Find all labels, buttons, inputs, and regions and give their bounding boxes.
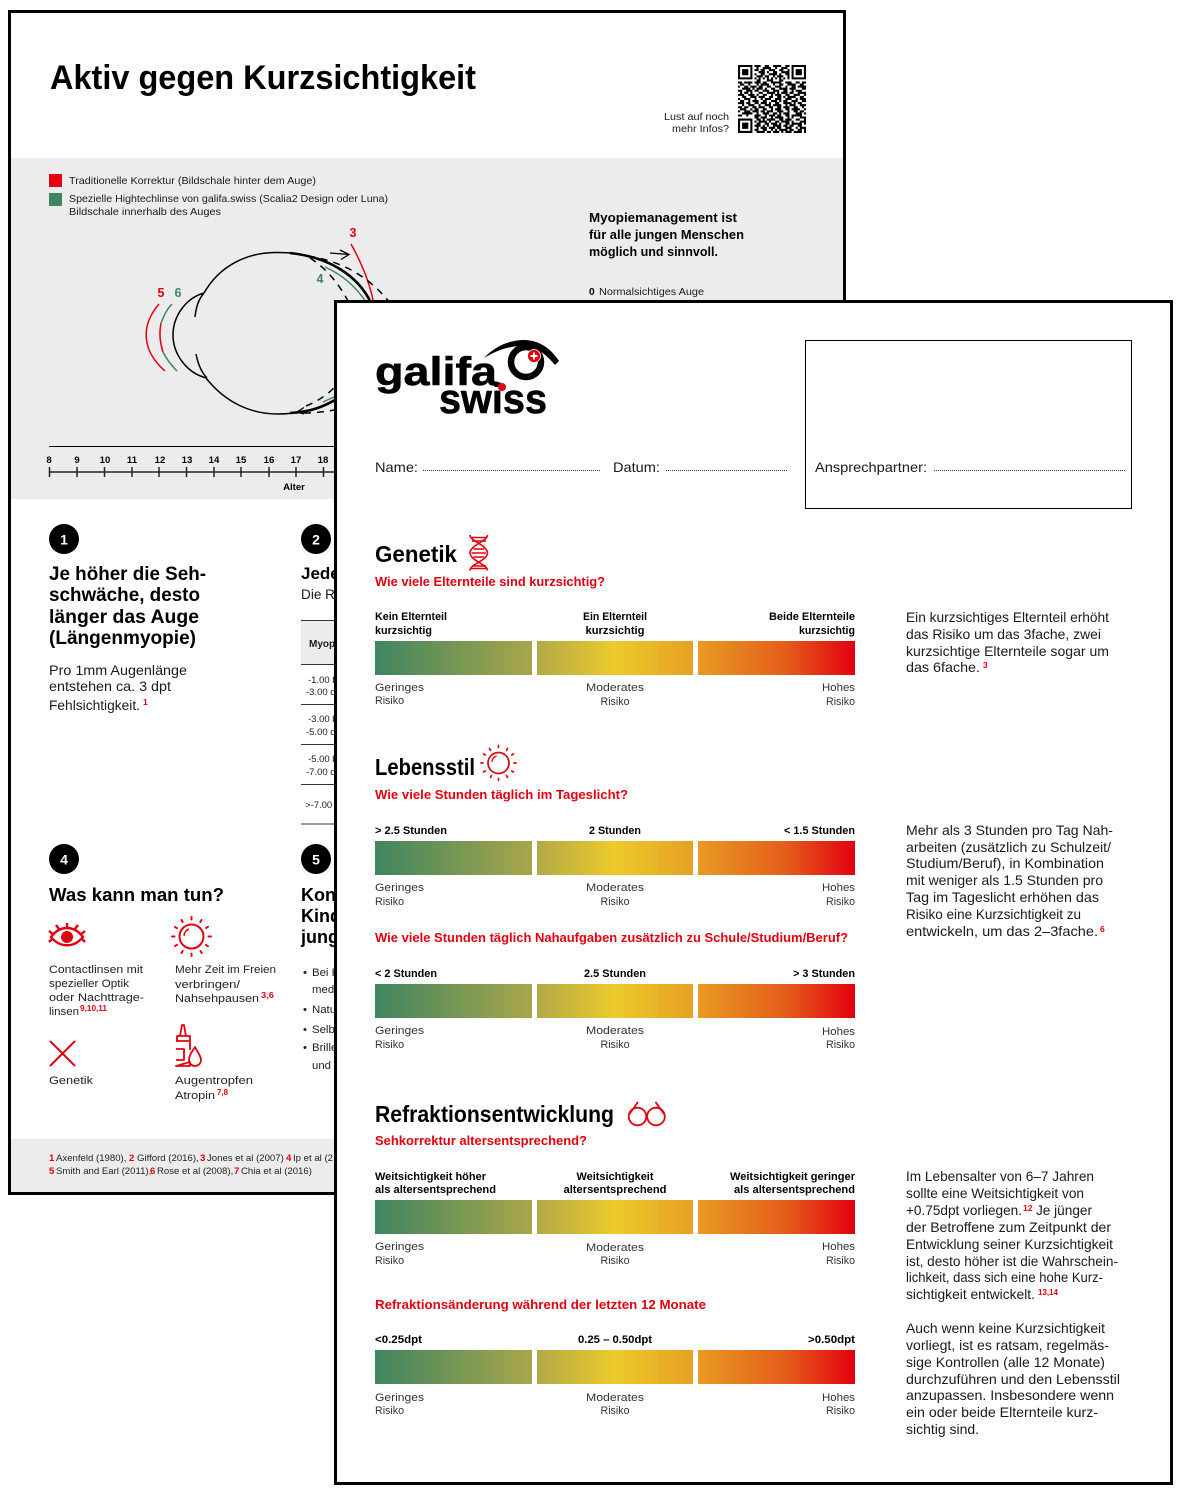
risk scale: correction: Geringes	[375, 1241, 424, 1253]
risk scale: near work: Risiko	[826, 1039, 855, 1051]
risk scale: parents: Beide Elternteile	[769, 611, 855, 623]
section 2 with table: -7.00 d	[306, 767, 336, 778]
text: QR prompt	[664, 112, 729, 135]
risk scale: refraction change: Risiko	[600, 1405, 630, 1417]
logo: galifa swiss: galifa	[375, 350, 498, 394]
text: lifestyle note: arbeiten (zusätzlich zu Schulzeit/	[906, 840, 1111, 855]
text: myopia management: Myopiemanagement ist	[589, 211, 738, 225]
section 5: •	[303, 967, 307, 979]
text: refraction note: durchzuführen und den Lebensstil	[906, 1372, 1120, 1387]
labels: eye diagram numbers: 5	[158, 286, 165, 300]
section 5: •	[303, 1024, 307, 1036]
risk scale: parents: Kein Elternteil	[375, 611, 447, 623]
section 1: Pro 1mm Augenlänge	[49, 663, 187, 678]
text: refraction note: Je jünger	[1036, 1203, 1092, 1218]
section 5: Kon	[301, 885, 336, 905]
text: normal eye legend: Normalsichtiges Auge	[599, 287, 704, 298]
section 2 with table	[301, 524, 340, 824]
section 2 with table: -5.00 d	[306, 727, 336, 738]
text: contact lenses: Contactlinsen mit	[49, 964, 144, 976]
text: refraction note: lichkeit, dass sich eine hohe Kurz-	[906, 1270, 1103, 1285]
legend: Spezielle Hightechlinse von galifa.swiss (Scalia2 Design oder Luna)	[69, 194, 388, 205]
section 1	[49, 524, 206, 713]
chart: age timeline: 12	[155, 455, 165, 466]
risk scale: correction: Weitsichtigkeit höher	[375, 1171, 486, 1183]
text: lifestyle note: mit weniger als 1.5 Stunden pro	[906, 873, 1103, 888]
text: outdoors: Mehr Zeit im Freien	[175, 964, 276, 976]
text: myopia management: für alle jungen Menschen	[589, 228, 744, 242]
text: myopia management: möglich und sinnvoll.	[589, 245, 718, 259]
text: outdoors: Nahsehpausen	[175, 993, 259, 1005]
text: outdoors: verbringen/	[175, 979, 241, 991]
heading: Genetik: Genetik	[375, 541, 457, 567]
panel: references: Gifford (2016),	[137, 1153, 199, 1164]
icon: QR code	[738, 66, 806, 132]
question: near work: Wie viele Stunden täglich Nahaufgaben zusätzlich zu Schule/Studium/Beruf?	[375, 931, 848, 945]
text: QR prompt: mehr Infos?	[672, 124, 729, 135]
chart: eye diagram	[146, 244, 390, 414]
risk scale: daylight	[375, 825, 855, 908]
risk scale: near work: < 2 Stunden	[375, 968, 437, 980]
risk scale: parents: Ein Elternteil	[583, 611, 647, 623]
text: refraction note: Im Lebensalter von 6–7 Jahren	[906, 1169, 1094, 1184]
legend: Traditionelle Korrektur (Bildschale hinter dem Auge)	[69, 176, 316, 187]
risk scale: daylight: > 2.5 Stunden	[375, 825, 447, 837]
logo: galifa swiss	[375, 340, 559, 422]
heading: Refraktionsentwicklung: Refraktionsentwicklung	[375, 1101, 614, 1127]
text: genetics note: 3	[983, 660, 988, 670]
chart: age timeline: 13	[182, 455, 192, 466]
title: Aktiv gegen Kurzsichtigkeit	[50, 59, 476, 97]
text: lifestyle note	[906, 823, 1113, 939]
section 5: 5	[312, 852, 320, 868]
risk scale: parents: Geringes	[375, 682, 424, 694]
panel: references: Smith and Earl (2011),	[56, 1166, 151, 1177]
risk scale: refraction change: >0.50dpt	[808, 1334, 856, 1346]
section 1: 1	[60, 532, 68, 548]
risk scale: refraction change	[375, 1334, 856, 1417]
risk scale: parents: kurzsichtig	[799, 625, 855, 637]
text: QR prompt: Lust auf noch	[664, 112, 729, 123]
text: refraction note: Entwicklung seiner Kurzsichtigkeit	[906, 1237, 1113, 1252]
text: genetics note: Ein kurzsichtiges Elternteil erhöht	[906, 610, 1109, 625]
risk scale: correction: Hohes	[822, 1241, 855, 1253]
section 5: Bei K	[312, 967, 340, 979]
icon: sun	[481, 746, 516, 780]
form: contact box	[806, 340, 1132, 508]
form: name and date: Datum:	[613, 460, 660, 475]
section 1: länger das Auge	[49, 607, 199, 628]
question: parents: Wie viele Elternteile sind kurzsichtig?	[375, 575, 605, 589]
risk scale: daylight: Moderates	[586, 882, 644, 894]
chart: age timeline: Alter	[283, 482, 305, 493]
risk scale: daylight: < 1.5 Stunden	[784, 825, 855, 837]
panel: eye diagram background	[11, 158, 843, 499]
panel: references: 5	[49, 1166, 55, 1177]
text: lifestyle note: Tag im Tageslicht erhöhen das	[906, 890, 1099, 905]
text: atropine	[175, 1075, 253, 1102]
risk scale: parents: Moderates	[586, 682, 644, 694]
panel: front page	[336, 302, 1172, 1484]
risk scale: near work: > 3 Stunden	[793, 968, 855, 980]
section 1: Je höher die Seh-	[49, 564, 206, 585]
text: myopia management	[589, 211, 744, 259]
risk scale: near work: Risiko	[375, 1039, 404, 1051]
section 5: Brille	[312, 1042, 337, 1054]
text: lifestyle note: entwickeln, um das 2–3fache.	[906, 924, 1098, 939]
section 2 with table: -3.00 b	[308, 714, 338, 725]
section 4: Was kann man tun?	[49, 885, 224, 905]
text: refraction note: sige Kontrollen (alle 12 Monate)	[906, 1355, 1105, 1370]
risk scale: correction: altersentsprechend	[564, 1184, 666, 1196]
text: genetics note	[906, 610, 1109, 675]
section 5: Selb	[312, 1024, 335, 1036]
section 5: •	[303, 1042, 307, 1054]
risk scale: refraction change: Geringes	[375, 1392, 424, 1404]
risk scale: parents: Risiko	[826, 696, 855, 708]
risk scale: daylight: Hohes	[822, 882, 855, 894]
question: refraction change: Refraktionsänderung während der letzten 12 Monate	[375, 1298, 706, 1312]
form: name and date	[375, 460, 787, 475]
text: refraction note: 12	[1023, 1203, 1033, 1213]
risk scale: refraction change: 0.25 – 0.50dpt	[578, 1334, 652, 1346]
labels: eye diagram numbers: 6	[175, 286, 182, 300]
text: refraction note: Auch wenn keine Kurzsichtigkeit	[906, 1321, 1105, 1336]
section 5: Kinde	[301, 906, 351, 926]
legend: Bildschale innerhalb des Auges	[69, 207, 221, 218]
section 2 with table: 2	[312, 532, 320, 548]
risk scale: refraction change: Hohes	[822, 1392, 855, 1404]
section 1: entstehen ca. 3 dpt	[49, 679, 171, 694]
risk scale: correction: als altersentsprechend	[734, 1184, 855, 1196]
risk scale: parents	[375, 611, 855, 708]
logo: galifa swiss: swiss	[439, 375, 547, 422]
risk scale: refraction change: Moderates	[586, 1392, 644, 1404]
risk scale: correction: Risiko	[600, 1255, 630, 1267]
panel: references: Axenfeld (1980),	[56, 1153, 126, 1164]
chart: age timeline: 17	[291, 455, 301, 466]
form: name and date: Name:	[375, 460, 418, 475]
text: outdoors: 3,6	[261, 990, 274, 1000]
text: contact lenses: oder Nachttrage-	[49, 992, 144, 1004]
panel: references: 4	[286, 1153, 292, 1164]
form: contact box: Ansprechpartner:	[815, 460, 927, 475]
section 1: 1	[143, 697, 148, 707]
section 1: Fehlsichtigkeit.	[49, 698, 140, 713]
risk scale: daylight: Risiko	[600, 896, 630, 908]
risk scale: daylight: Geringes	[375, 882, 424, 894]
chart: age timeline: 8	[46, 455, 52, 466]
risk scale: daylight: Risiko	[826, 896, 855, 908]
section 4: 4	[60, 852, 68, 868]
legend	[49, 174, 388, 218]
labels: eye diagram numbers: 3	[350, 226, 357, 240]
chart: age timeline: 11	[127, 455, 138, 466]
text: refraction note: 13,14	[1038, 1287, 1058, 1297]
section 2 with table: Die Ri	[301, 587, 338, 602]
risk scale: parents: Hohes	[822, 682, 855, 694]
text: lifestyle note: Risiko eine Kurzsichtigkeit zu	[906, 907, 1081, 922]
text: contact lenses: spezieller Optik	[49, 978, 129, 990]
section 2 with table: -3.00 d	[306, 687, 336, 698]
panel: references: Rose et al (2008),	[157, 1166, 233, 1177]
section 2 with table: Myop	[309, 639, 335, 650]
panel: references: 7	[234, 1166, 239, 1177]
section 5: und	[312, 1060, 331, 1072]
chart: age timeline: 16	[264, 455, 274, 466]
risk scale: near work: 2.5 Stunden	[584, 968, 646, 980]
panel: references: Chia et al (2016)	[241, 1166, 312, 1177]
risk scale: daylight: Risiko	[375, 896, 404, 908]
section 5: •	[303, 1004, 307, 1016]
icon: sun	[172, 917, 211, 956]
chart: age timeline: 9	[74, 455, 80, 466]
text: refraction note: ein oder beide Elternteile kurz-	[906, 1405, 1098, 1420]
question: correction: Sehkorrektur altersentsprechend?	[375, 1134, 587, 1148]
heading: Lebensstil: Lebensstil	[375, 754, 475, 780]
panel: references: 1	[49, 1153, 55, 1164]
text: refraction note	[906, 1169, 1120, 1437]
panel: back page	[10, 12, 844, 1194]
text: genetics: Genetik	[49, 1075, 93, 1087]
chart: age timeline: 14	[209, 455, 220, 466]
section 2 with table: >-7.00 d	[305, 800, 340, 811]
risk scale: correction: Weitsichtigkeit geringer	[730, 1171, 855, 1183]
panel: references	[11, 1139, 843, 1192]
text: refraction note: sichtig sind.	[906, 1422, 979, 1437]
chart: age timeline	[46, 446, 340, 493]
panel: references: Ip et al (2	[293, 1153, 333, 1164]
risk scale: correction: als altersentsprechend	[375, 1184, 496, 1196]
section 5: jung	[300, 927, 339, 947]
risk scale: refraction change: Risiko	[375, 1405, 404, 1417]
text: contact lenses	[49, 964, 144, 1018]
risk scale: near work: Geringes	[375, 1025, 424, 1037]
text: atropine: Atropin	[175, 1090, 215, 1102]
text: normal eye legend: 0	[589, 287, 595, 298]
text: refraction note: +0.75dpt vorliegen.	[906, 1203, 1022, 1218]
text: refraction note: vorliegt, ist es ratsam, regelmäs-	[906, 1338, 1109, 1353]
panel: references: 6	[150, 1166, 155, 1177]
section 4	[49, 844, 276, 1102]
text: refraction note: sollte eine Weitsichtigkeit von	[906, 1186, 1084, 1201]
text: refraction note: sichtigkeit entwickelt.	[906, 1287, 1035, 1302]
text: refraction note: der Betroffene zum Zeitpunkt der	[906, 1220, 1111, 1235]
text: genetics note: das Risiko um das 3fache, zwei	[906, 627, 1101, 642]
chart: age timeline: 15	[236, 455, 247, 466]
section 5: Natu	[312, 1004, 336, 1016]
section 2 with table: Jede	[301, 564, 340, 583]
risk scale: correction: Moderates	[586, 1242, 644, 1254]
icon: eye	[49, 923, 85, 945]
section 5: med	[312, 984, 334, 996]
risk scale: near work: Risiko	[600, 1039, 630, 1051]
icon: DNA	[470, 535, 488, 570]
chart: age timeline: 10	[100, 455, 110, 466]
risk scale: near work: Hohes	[822, 1026, 855, 1038]
section 1: schwäche, desto	[49, 585, 200, 606]
text: atropine: Augentropfen	[175, 1075, 253, 1087]
risk scale: parents: kurzsichtig	[586, 625, 644, 637]
risk scale: correction: Weitsichtigkeit	[576, 1171, 654, 1183]
text: genetics note: das 6fache.	[906, 660, 980, 675]
labels: eye diagram numbers	[158, 226, 357, 300]
labels: eye diagram numbers: 4	[317, 272, 324, 286]
text: genetics note: kurzsichtige Elternteile sogar um	[906, 644, 1109, 659]
risk scale: daylight: 2 Stunden	[589, 825, 641, 837]
chart: age timeline: 18	[318, 455, 329, 466]
risk scale: correction	[375, 1171, 855, 1267]
section 1: (Längenmyopie)	[49, 628, 196, 649]
risk scale: refraction change: Risiko	[826, 1405, 855, 1417]
question: daylight: Wie viele Stunden täglich im Tageslicht?	[375, 788, 628, 802]
risk scale: parents: kurzsichtig	[375, 625, 432, 637]
risk scale: near work: Moderates	[586, 1025, 644, 1037]
text: lifestyle note: Mehr als 3 Stunden pro Tag Nah-	[906, 823, 1113, 838]
risk scale: parents: Risiko	[600, 696, 630, 708]
text: refraction note: anzupassen. Insbesondere wenn	[906, 1388, 1114, 1403]
risk scale: correction: Risiko	[826, 1255, 855, 1267]
panel: references: Jones et al (2007)	[207, 1153, 284, 1164]
icon: eye drops	[176, 1025, 201, 1066]
text: atropine: 7,8	[217, 1087, 228, 1097]
text: lifestyle note: Studium/Beruf), in Kombination	[906, 856, 1104, 871]
text: contact lenses: 9,10,11	[80, 1003, 107, 1013]
text: refraction note: ist, desto höher ist die Wahrschein-	[906, 1254, 1118, 1269]
risk scale: refraction change: <0.25dpt	[375, 1334, 423, 1346]
icon: glasses	[629, 1102, 665, 1125]
risk scale: parents: Risiko	[375, 695, 404, 707]
risk scale: near work	[375, 968, 855, 1051]
panel: references: 3	[200, 1153, 205, 1164]
icon: cross	[50, 1041, 75, 1066]
section 2 with table: -1.00 b	[308, 675, 338, 686]
section 2 with table: -5.00 b	[308, 754, 338, 765]
panel: references: 2	[129, 1153, 134, 1164]
text: outdoors	[175, 964, 276, 1005]
section 5	[300, 844, 351, 1072]
text: contact lenses: linsen	[49, 1006, 79, 1018]
text: lifestyle note: 6	[1100, 924, 1105, 934]
risk scale: correction: Risiko	[375, 1255, 404, 1267]
